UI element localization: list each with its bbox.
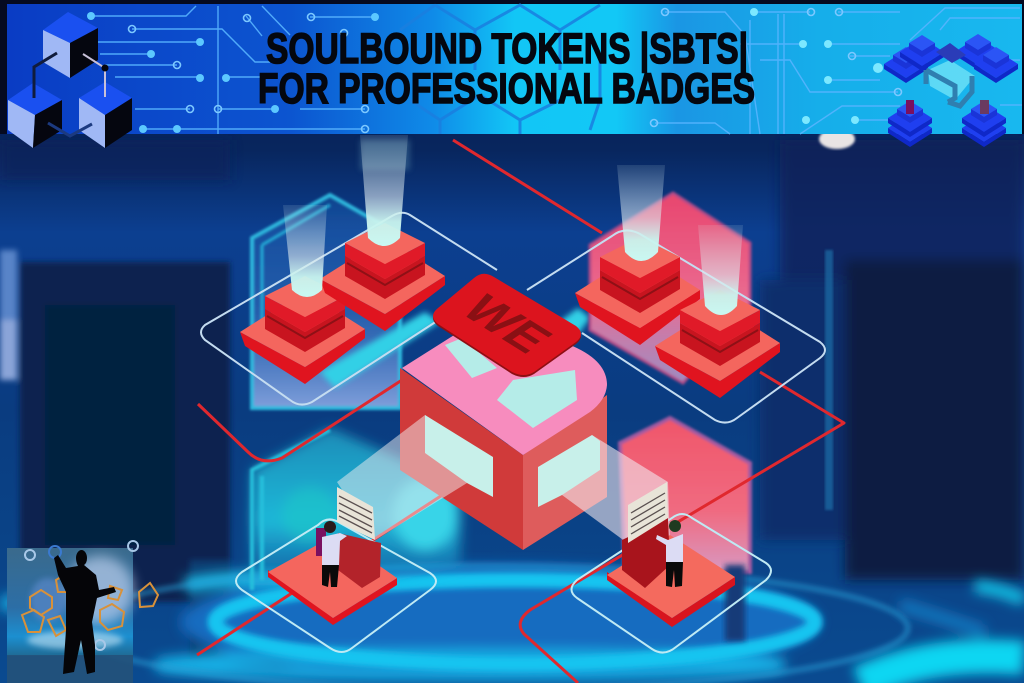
platform outline: upper left — [201, 213, 497, 405]
token stack 3 — [575, 237, 700, 345]
central cube — [400, 325, 607, 550]
circuit lines — [90, 6, 1022, 134]
platform outline: lower right — [572, 514, 771, 653]
light beam: left window to paper — [337, 415, 493, 540]
circuit nodes — [87, 8, 883, 133]
lower token 1 — [888, 100, 932, 147]
title line 2: FOR PROFESSIONAL BADGES — [258, 65, 755, 113]
cube connectors — [34, 53, 108, 136]
person — [316, 521, 347, 587]
icon: isometric blue network — [884, 34, 1018, 147]
token stack 4 — [655, 290, 780, 398]
blue ring nodes — [25, 541, 138, 650]
cube left window — [425, 415, 493, 497]
light beam 3 — [617, 165, 665, 261]
teal bracket — [926, 70, 972, 106]
light beam: right window to paper — [562, 435, 670, 545]
WE badge — [433, 274, 581, 377]
floor rings — [0, 564, 1024, 683]
orange hexagons — [22, 574, 158, 636]
circuit rings — [128, 8, 902, 132]
workstation: lower right — [607, 482, 735, 627]
base plate — [268, 570, 397, 625]
token stack 2 — [320, 223, 445, 331]
document — [337, 487, 375, 540]
honeycomb pattern — [400, 5, 600, 134]
cube top face — [402, 325, 607, 455]
lower token 2 — [962, 100, 1006, 147]
glow block — [928, 60, 975, 100]
silhouette — [54, 550, 116, 674]
hexagon: lower right red — [620, 418, 750, 572]
header banner — [0, 0, 1024, 134]
cube right window — [538, 435, 600, 507]
platform outline: upper right — [527, 230, 825, 423]
thumbnail: person at holographic display — [7, 541, 158, 683]
cube A — [43, 12, 98, 78]
cube C — [79, 82, 132, 148]
hexagon: upper left cyan — [252, 195, 400, 408]
platform outline: lower left — [236, 519, 436, 652]
workstation: lower left — [268, 487, 397, 625]
token stack 1 — [240, 276, 365, 384]
dark column — [725, 565, 745, 641]
desk — [622, 518, 670, 588]
desk — [338, 533, 381, 588]
icon: blockchain cubes — [8, 12, 132, 148]
cyan glow strip — [320, 308, 590, 388]
light beam 2 — [360, 135, 408, 246]
cube right face — [523, 395, 607, 550]
light beam 1 — [283, 205, 327, 297]
cube top window 1 — [445, 338, 497, 378]
badge lettering: WE — [450, 287, 564, 361]
document — [628, 482, 668, 543]
left token cluster — [884, 35, 944, 83]
cube B — [8, 83, 62, 148]
person — [656, 520, 683, 587]
red connector lines — [197, 140, 844, 683]
white blob under banner — [819, 129, 855, 149]
hexagon: lower left cyan — [252, 428, 460, 585]
title — [258, 25, 755, 113]
base plate — [607, 572, 735, 627]
cube left face — [400, 368, 523, 550]
light beam 4 — [698, 225, 743, 315]
title line 1: SOULBOUND TOKENS |SBTS| — [266, 25, 748, 73]
central pad — [936, 43, 966, 63]
hexagon: upper right red — [590, 193, 750, 383]
cube top window 2 — [497, 370, 577, 428]
right token cluster — [956, 34, 1018, 83]
hexagon outline: lower left — [252, 430, 330, 590]
